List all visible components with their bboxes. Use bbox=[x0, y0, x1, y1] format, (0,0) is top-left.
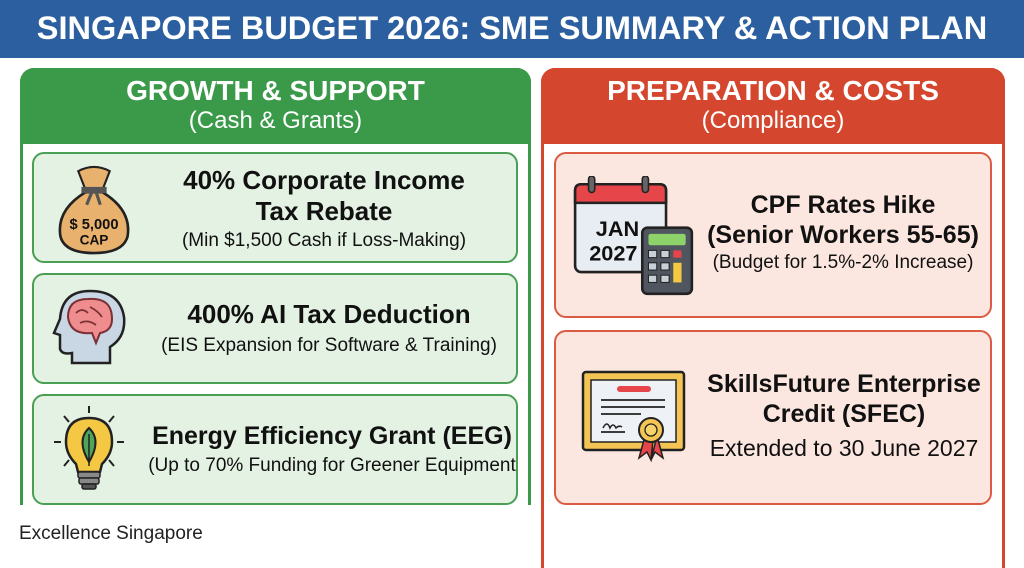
card: SkillsFuture Enterprise Credit bbox=[554, 330, 992, 505]
title bar: SINGAPORE BUDGET 2026: SME SUMMARY & ACTION PLAN bbox=[37, 10, 987, 46]
panel: growth & support bbox=[20, 68, 531, 505]
heading: growth & support: (Cash & Grants) bbox=[189, 107, 362, 134]
panel: preparation & costs bbox=[541, 68, 1005, 568]
heading: growth & support: GROWTH & SUPPORT bbox=[126, 75, 425, 106]
icon: money bag bbox=[58, 166, 130, 254]
icon: calendar and calculator: JAN bbox=[596, 216, 639, 241]
text: EEG: (Up to 70% Funding for Greener Equipment bbox=[148, 455, 516, 476]
text: AI deduction bbox=[161, 299, 497, 356]
card: AI tax deduction bbox=[32, 273, 518, 384]
text: CPF: CPF Rates Hike bbox=[751, 191, 935, 219]
card: energy efficiency grant bbox=[32, 394, 518, 505]
text: rebate bbox=[182, 165, 466, 251]
text: CPF: (Budget for 1.5%-2% Increase) bbox=[713, 252, 973, 273]
title bar bbox=[0, 0, 1024, 58]
text: CPF: (Senior Workers 55-65) bbox=[707, 221, 979, 249]
icon: money bag: CAP bbox=[80, 233, 108, 248]
text: SFEC: Credit (SFEC) bbox=[763, 400, 925, 428]
heading: preparation & costs: PREPARATION & COSTS bbox=[607, 75, 939, 106]
card: CPF rates hike bbox=[554, 152, 992, 318]
footer: source: Excellence Singapore bbox=[19, 523, 203, 544]
text: AI deduction: (EIS Expansion for Software & Training) bbox=[161, 335, 497, 356]
text: CPF bbox=[707, 191, 979, 273]
icon: brain head bbox=[52, 290, 126, 364]
text: SFEC bbox=[707, 370, 981, 461]
text: EEG bbox=[148, 422, 516, 476]
text: SFEC: Extended to 30 June 2027 bbox=[710, 435, 978, 461]
heading: growth & support bbox=[20, 68, 531, 144]
text: AI deduction: 400% AI Tax Deduction bbox=[187, 299, 471, 329]
text: rebate: Tax Rebate bbox=[256, 196, 392, 226]
icon: certificate bbox=[582, 370, 686, 462]
icon: calendar and calculator: 2027 bbox=[589, 241, 637, 266]
text: EEG: Energy Efficiency Grant (EEG) bbox=[152, 422, 512, 450]
text: rebate: (Min $1,500 Cash if Loss-Making) bbox=[182, 230, 466, 251]
icon: calendar and calculator bbox=[574, 176, 694, 296]
card: corporate income tax rebate bbox=[32, 152, 518, 263]
icon: lightbulb with leaf bbox=[54, 406, 124, 490]
text: rebate: 40% Corporate Income bbox=[183, 165, 465, 195]
heading: preparation & costs: (Compliance) bbox=[702, 107, 844, 134]
text: SFEC: SkillsFuture Enterprise bbox=[707, 370, 981, 398]
icon: money bag: $ 5,000 bbox=[69, 217, 119, 233]
heading: preparation & costs bbox=[541, 68, 1005, 144]
